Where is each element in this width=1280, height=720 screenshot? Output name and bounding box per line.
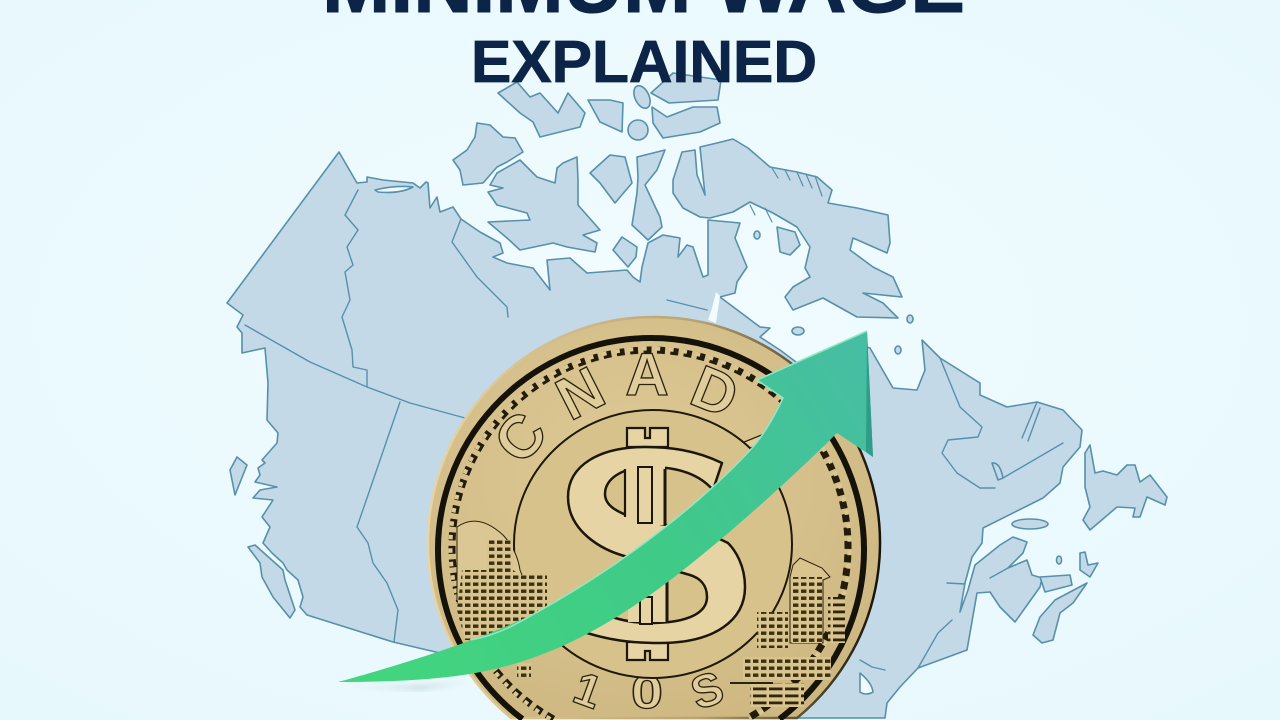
Baffin Island — [673, 139, 902, 318]
Yukon border — [342, 190, 367, 387]
Cape Breton — [1080, 552, 1098, 577]
dollar sign — [568, 428, 745, 660]
coin body — [428, 317, 880, 718]
lower vertical strip — [628, 560, 667, 622]
arrow highlight edge — [470, 331, 867, 640]
Baffin fjords — [750, 168, 822, 222]
St Lawrence line — [947, 583, 965, 584]
Hudson strait line — [667, 300, 707, 310]
60th parallel — [245, 325, 465, 418]
King William Island — [613, 237, 637, 267]
title — [322, 0, 965, 95]
Somerset and Boothia — [632, 150, 665, 240]
upper vertical strip — [625, 465, 665, 525]
Haida Gwaii — [230, 457, 247, 495]
Melville Island — [498, 82, 585, 137]
small Arctic island — [631, 83, 653, 111]
Canadian dollar coin — [428, 317, 880, 719]
letter D: D — [682, 352, 747, 431]
BC Alberta border — [357, 402, 400, 642]
map of Canada — [227, 73, 1167, 718]
lower right counter edge — [666, 570, 668, 623]
lower centre bar — [640, 597, 652, 624]
Baffin lake — [777, 227, 800, 255]
Vancouver Island — [248, 545, 295, 618]
provincial borders — [245, 190, 1063, 670]
dollar bottom bars — [627, 642, 668, 660]
Great Bear Lake — [375, 186, 413, 192]
NWT Nunavut border — [452, 219, 508, 317]
Prince of Wales Island — [590, 155, 632, 203]
Bathurst Island — [588, 100, 623, 132]
Great Lakes gap — [860, 673, 873, 694]
letter C: C — [481, 399, 560, 475]
Gulf line — [1003, 443, 1063, 478]
growth arrow — [338, 331, 873, 690]
Maine border — [918, 620, 952, 668]
black rim ring — [438, 338, 864, 719]
Victoria Island — [488, 157, 600, 252]
dollar top bars — [627, 428, 668, 447]
Lake Melville lines — [1022, 402, 1040, 441]
Ontario lake line — [860, 660, 885, 670]
upper centre bar — [638, 467, 652, 523]
coin lettering — [481, 341, 807, 719]
bottom digit 1: 1 — [567, 661, 609, 719]
arrow body and head — [338, 331, 873, 682]
Devon Island — [652, 107, 720, 138]
Ellesmere Island — [651, 73, 721, 103]
Labrador and Quebec lines — [940, 358, 995, 488]
bottom letter S: S — [684, 661, 730, 719]
arrow head shade — [866, 331, 873, 457]
bottom digit 0: 0 — [631, 666, 663, 718]
letter N: N — [546, 354, 615, 433]
left city skyline — [457, 521, 547, 677]
Prince Edward Island — [1040, 575, 1072, 592]
inner circle — [514, 410, 792, 678]
Nova Scotia — [1033, 583, 1087, 643]
upper right counter edge — [664, 469, 666, 525]
Magdalen Island — [1056, 556, 1062, 564]
denticle ring — [451, 349, 850, 719]
letter A behind arrow: A — [728, 407, 807, 484]
small Hudson islands — [792, 327, 804, 335]
upper left counter edge — [624, 469, 626, 517]
right city skyline — [730, 558, 845, 707]
Anticosti Island — [1012, 519, 1048, 529]
Banks Island — [453, 123, 523, 185]
Gaspe line — [990, 568, 1008, 578]
arrow shadow — [350, 682, 470, 690]
Foxe strait gap — [708, 292, 720, 323]
title line 2: EXPLAINED — [471, 29, 817, 95]
mainland — [227, 152, 1082, 718]
dollar S shape — [568, 447, 745, 643]
Cornwallis Island — [628, 120, 648, 140]
letter A: A — [625, 341, 669, 408]
James Bay inlet — [992, 463, 1003, 480]
Newfoundland — [1083, 445, 1167, 530]
